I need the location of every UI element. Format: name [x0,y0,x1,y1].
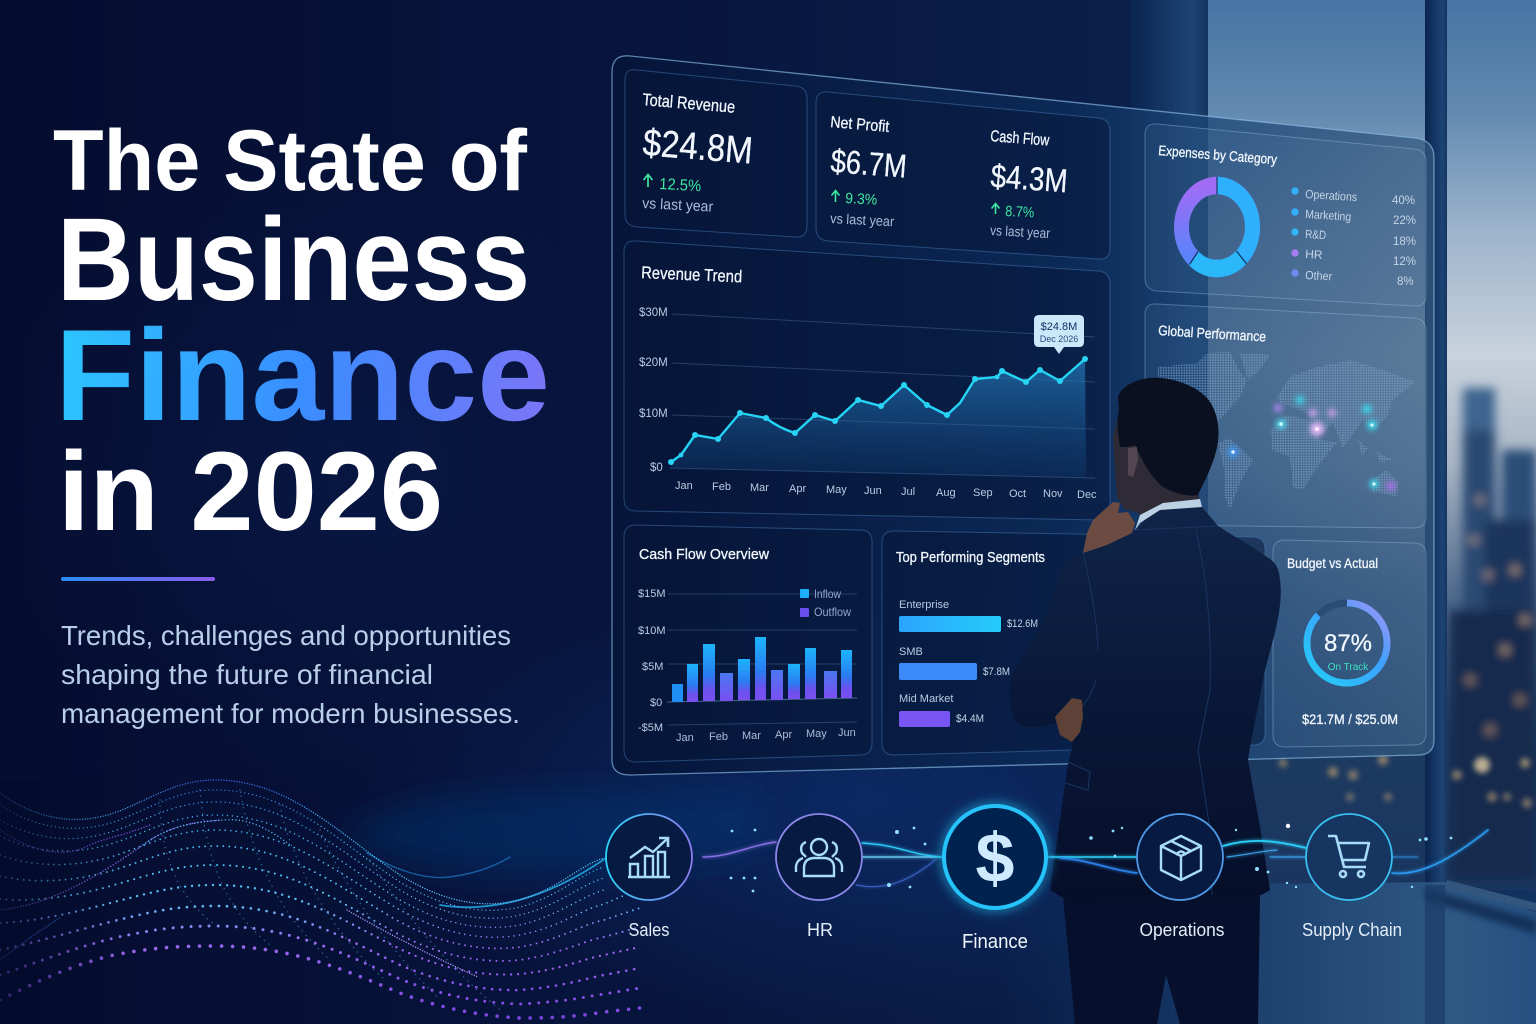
tooltip [1034,315,1084,354]
node: supply chain [1302,814,1402,940]
card: revenue trend line chart: $10M [639,408,668,420]
card: cash flow overview bar chart: Mar [742,730,761,742]
card: top performing segments: $12.6M [1007,618,1038,630]
tooltip: Dec 2026 [1040,334,1078,344]
card: global performance map: Global Performance [1158,322,1267,345]
card: net profit and cash flow: vs last year [990,222,1051,241]
card: top performing segments: $4.4M [956,713,984,725]
shirt collar [1135,499,1202,530]
world map [1158,352,1415,510]
node: sales [606,814,692,940]
subtitle: management for modern businesses. [61,698,520,729]
icon: dollar sign: $ [976,819,1014,897]
neck and face [1113,420,1200,518]
donut legend: Other [1305,268,1333,283]
card: cash flow overview bar chart: Feb [709,731,728,743]
donut legend: Operations [1305,187,1358,204]
card: expenses by category [1145,124,1426,306]
card: cash flow overview bar chart: Jun [838,727,856,739]
person viewing dashboard [1010,378,1281,1024]
card: total revenue: 12.5% [659,176,702,195]
donut legend [1291,187,1416,288]
card: revenue trend line chart: Dec [1077,489,1097,501]
card: top performing segments: $7.8M [983,666,1010,678]
card: total revenue [625,70,807,237]
window with blurred city skyline [1000,0,1536,1024]
hand at chin [1083,502,1135,553]
node: finance [944,806,1046,953]
map hotspots [1228,396,1396,490]
card: budget vs actual: On Track [1328,662,1369,673]
card: net profit and cash flow: 9.3% [845,190,878,209]
card: top performing segments: Mid Market [899,693,953,705]
dotted data wave [0,780,760,1024]
icon: bar chart with arrow [628,838,670,877]
card: top performing segments: SMB [899,646,923,658]
card: revenue trend line chart: Jul [901,486,915,498]
card: cash flow overview bar chart [624,525,872,762]
donut legend: 40% [1392,195,1415,207]
card: net profit and cash flow: Net Profit [830,114,890,136]
card: cash flow overview bar chart: May [806,728,827,740]
donut chart [1167,168,1267,286]
card: net profit and cash flow: $4.3M [990,157,1069,199]
bars [672,637,852,702]
card: revenue trend line chart: Revenue Trend [641,263,743,286]
donut legend: 12% [1393,256,1416,268]
card: revenue trend line chart: Apr [789,483,806,495]
bar legend: Inflow [814,587,841,601]
card: global performance map [1145,304,1426,528]
suit jacket [1010,507,1281,902]
card: revenue trend line chart: $0 [650,462,663,474]
card: top performing segments [882,531,1265,755]
card: expenses by category: Expenses by Category [1158,142,1278,167]
card: cash flow overview bar chart: $0 [650,697,662,709]
card: revenue trend line chart: Oct [1009,488,1026,500]
card: net profit and cash flow: vs last year [830,210,895,229]
donut legend: R&D [1305,227,1327,242]
donut legend: 22% [1393,215,1416,227]
card: budget vs actual: 87% [1324,630,1372,657]
card: revenue trend line chart: $20M [639,357,668,369]
card: net profit and cash flow: 8.7% [1005,203,1035,222]
department flow connectors [692,824,1488,892]
card: total revenue: Total Revenue [642,90,736,117]
card: revenue trend line chart: Jun [864,485,882,497]
card: revenue trend line chart: Mar [750,482,769,494]
donut legend: 18% [1393,236,1416,248]
title: in 2026 [58,429,443,554]
card: net profit and cash flow: $6.7M [829,142,908,185]
card: revenue trend line chart: Nov [1043,488,1063,500]
card: revenue trend line chart: Aug [936,487,956,499]
card: cash flow overview bar chart: $15M [638,588,666,600]
node: supply chain: Supply Chain [1302,920,1402,940]
title: The State of [53,113,527,209]
card: budget vs actual: Budget vs Actual [1287,555,1378,571]
ear [1128,447,1138,477]
donut legend: 8% [1397,276,1414,288]
bar legend [800,587,851,619]
node: finance: Finance [962,931,1028,953]
node: operations [1137,814,1224,940]
card: revenue trend line chart: Feb [712,481,731,493]
card: revenue trend line chart: May [826,484,847,496]
icon: shopping cart [1328,836,1369,877]
subtitle: Trends, challenges and opportunities [61,620,511,651]
card: cash flow overview bar chart: -$5M [638,722,663,734]
card: revenue trend line chart: $30M [639,307,668,319]
node: sales: Sales [628,920,670,940]
node: HR [776,814,862,940]
card: cash flow overview bar chart: Jan [676,732,694,744]
card: cash flow overview bar chart: $5M [642,661,663,673]
subtitle [61,620,520,729]
title: Finance [55,302,550,448]
card: cash flow overview bar chart: Cash Flow Overview [639,546,769,563]
card: revenue trend line chart: Jan [675,480,693,492]
card: revenue trend line chart: Sep [973,487,993,499]
icon: box [1161,836,1201,880]
bar legend: Outflow [814,605,851,619]
title [53,113,550,554]
card: net profit and cash flow: Cash Flow [990,128,1050,150]
card: budget vs actual: $21.7M / $25.0M [1302,711,1398,727]
ring gauge [1307,603,1387,683]
card: revenue trend line chart [624,241,1110,520]
node: operations: Operations [1140,920,1224,940]
donut legend: Marketing [1305,207,1352,224]
card: cash flow overview bar chart: Apr [775,729,792,741]
card: cash flow overview bar chart: $10M [638,625,666,637]
icon: people [796,839,842,876]
hair [1117,378,1219,496]
title: Business [57,194,530,326]
card: budget vs actual [1273,540,1426,747]
card: net profit and cash flow [816,92,1110,259]
card: total revenue: $24.8M [641,122,754,173]
card: total revenue: vs last year [642,195,714,216]
donut legend: HR [1305,247,1323,262]
node: HR: HR [807,920,833,940]
tooltip: $24.8M [1041,321,1077,333]
glass dashboard panel [612,56,1434,775]
card: top performing segments: Top Performing Segments [896,549,1045,566]
card: top performing segments: Enterprise [899,599,949,611]
folded hand [1055,698,1083,742]
trousers [1063,896,1260,1024]
subtitle: shaping the future of financial [61,659,433,690]
